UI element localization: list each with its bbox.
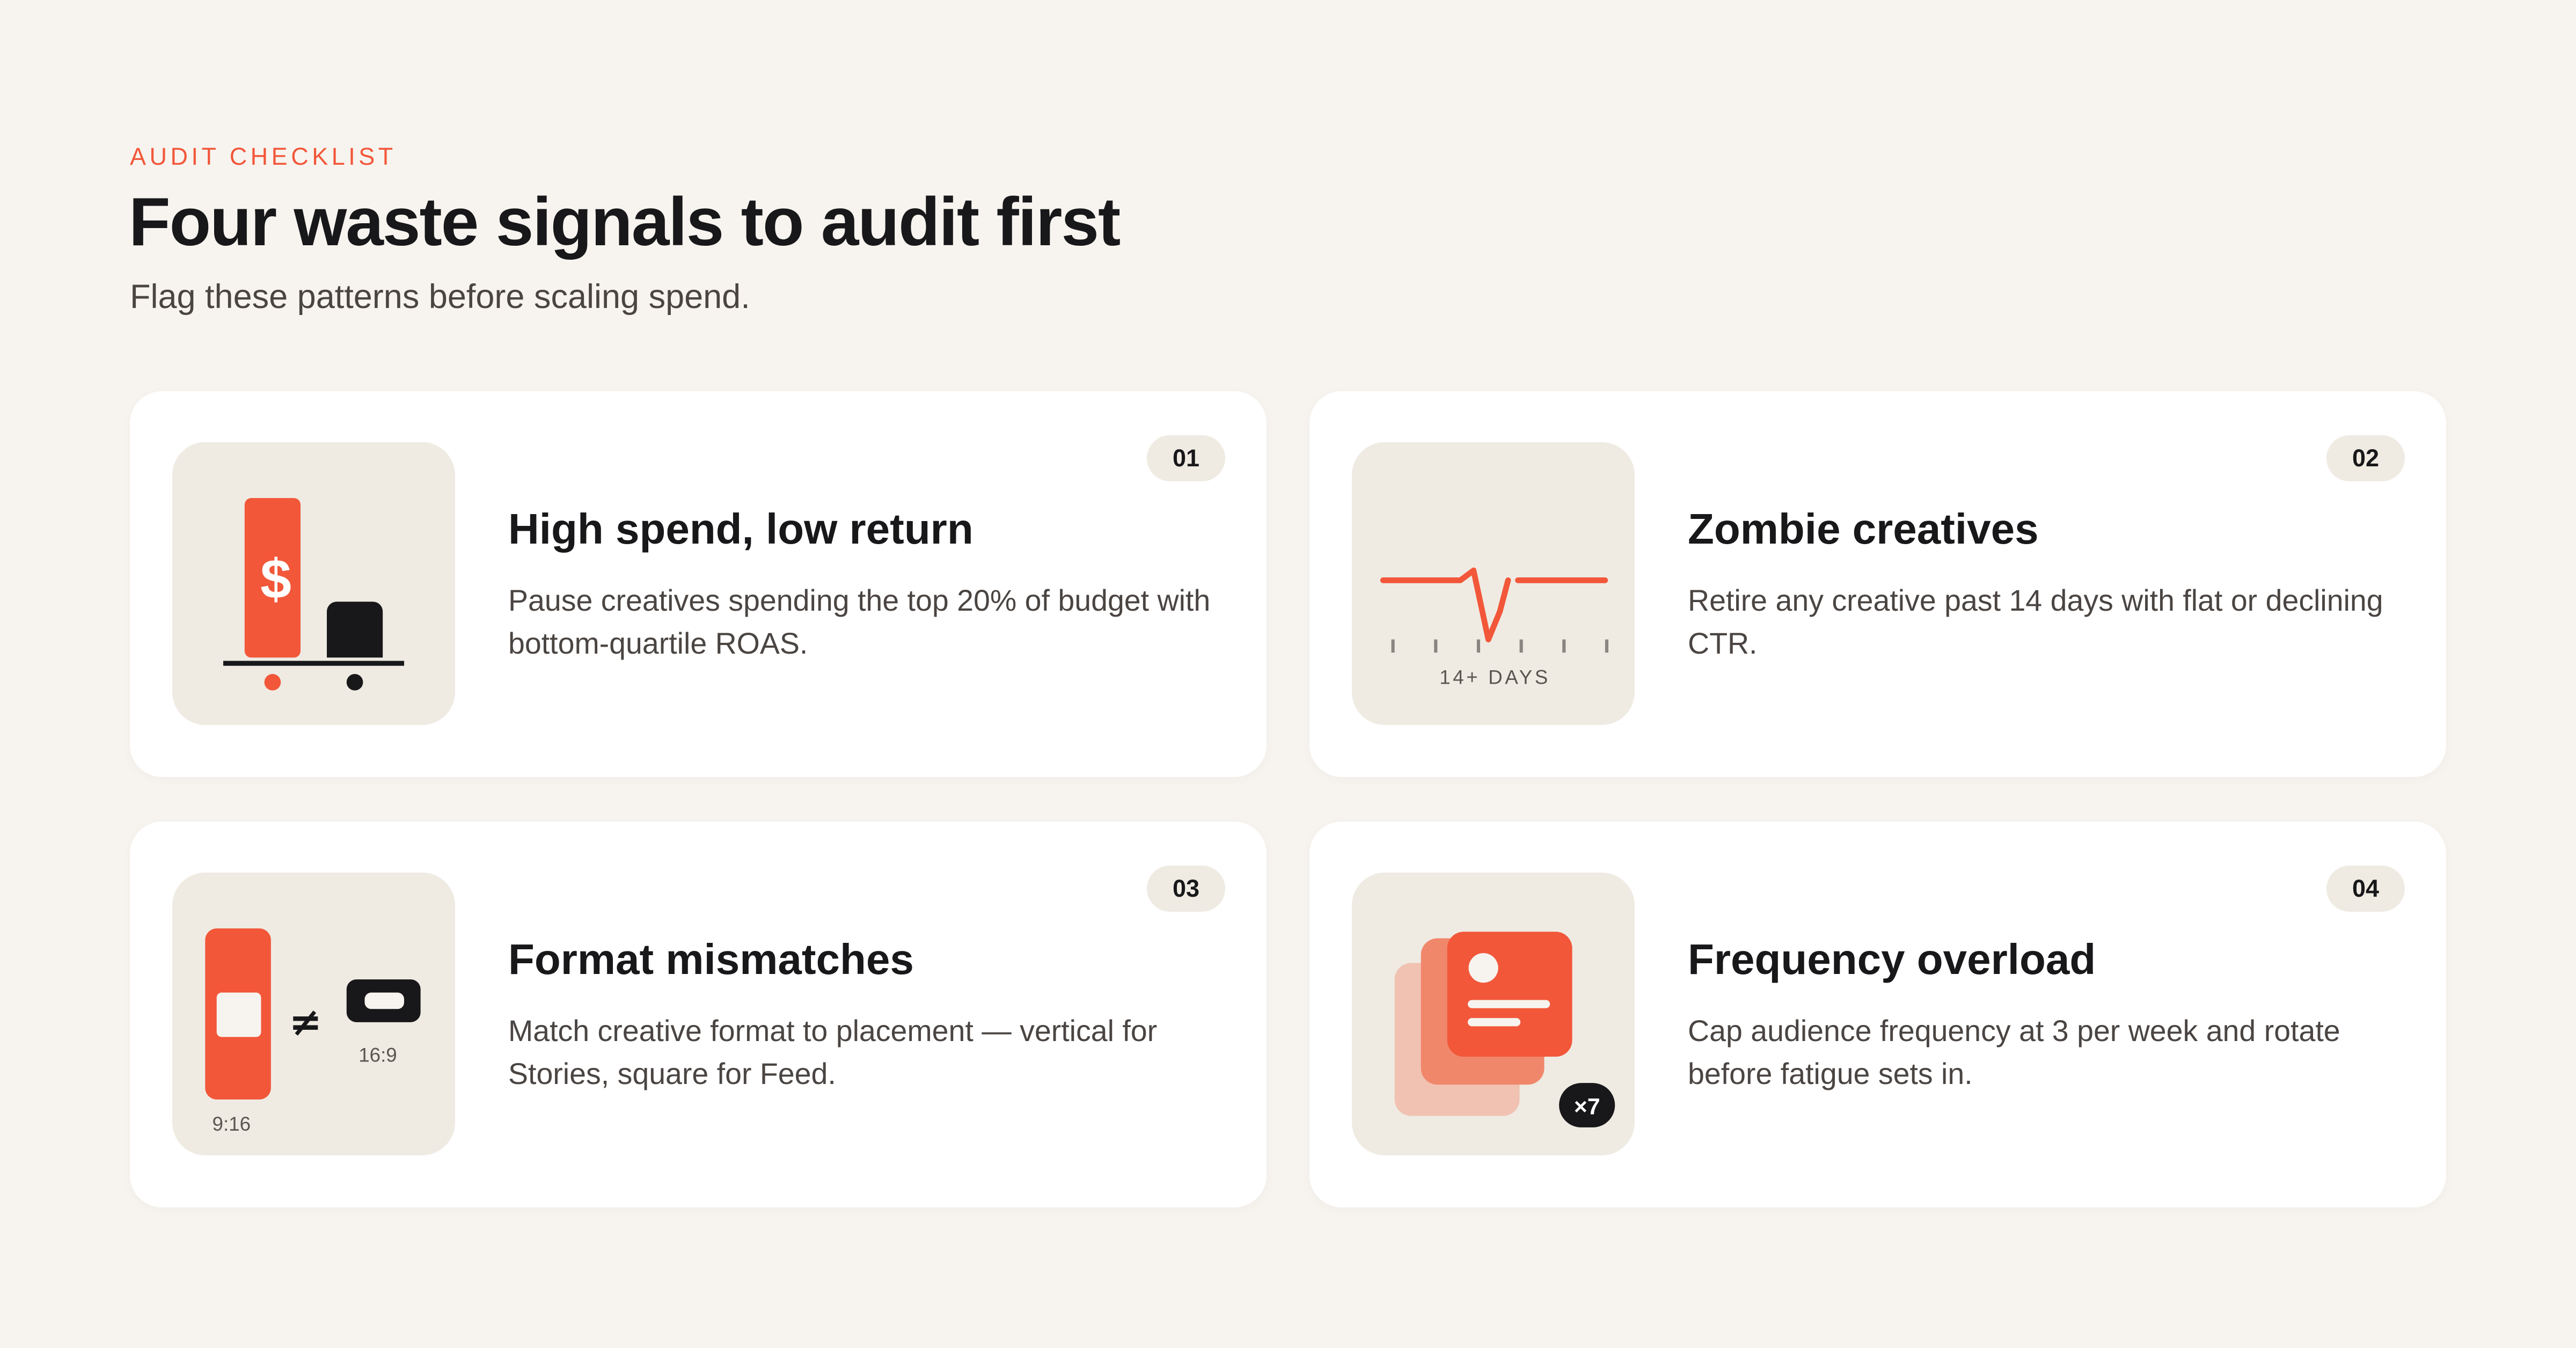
heading: Format mismatches (508, 935, 914, 983)
description: Pause creatives spending the top 20% of budget with bottom-quartile ROAS. (508, 584, 1210, 660)
icon: flatline pulse (1352, 442, 1635, 725)
panel: format mismatches (130, 822, 1267, 1207)
badge 04: 04 (2352, 875, 2379, 902)
badge 02 (2326, 435, 2405, 481)
description: Retire any creative past 14 days with flat or declining CTR. (1688, 584, 2383, 660)
subtitle: Flag these patterns before scaling spend. (130, 278, 750, 316)
icon: aspect ratios: ≠ (289, 999, 322, 1045)
icon: flatline pulse: 14+ DAYS (1439, 666, 1550, 688)
panel: high spend low return (130, 391, 1267, 777)
badge 04 (2326, 866, 2405, 912)
badge 02: 02 (2352, 444, 2379, 472)
badge 01 (1147, 435, 1225, 481)
badge 01: 01 (1173, 444, 1199, 472)
heading: Frequency overload (1688, 935, 2096, 983)
panel: zombie creatives (1309, 391, 2446, 777)
icon: aspect ratios: 9:16 (213, 1113, 251, 1135)
eyebrow: AUDIT CHECKLIST (130, 143, 397, 170)
icon: spend bars: $ (260, 548, 291, 611)
description: Cap audience frequency at 3 per week and rotate before fatigue sets in. (1688, 1014, 2340, 1090)
icon: stacked ads (1352, 873, 1635, 1155)
icon: aspect ratios (172, 873, 455, 1155)
title: Four waste signals to audit first (129, 184, 1119, 260)
icon: spend bars (172, 442, 455, 725)
panel: frequency overload (1309, 822, 2446, 1207)
icon: aspect ratios: 16:9 (358, 1044, 397, 1066)
icon: stacked ads: ×7 (1574, 1094, 1600, 1119)
description: Match creative format to placement — vertical for Stories, square for Feed. (508, 1014, 1157, 1090)
heading: High spend, low return (508, 505, 974, 553)
badge 03 (1147, 866, 1225, 912)
heading: Zombie creatives (1688, 505, 2039, 553)
badge 03: 03 (1173, 875, 1199, 902)
